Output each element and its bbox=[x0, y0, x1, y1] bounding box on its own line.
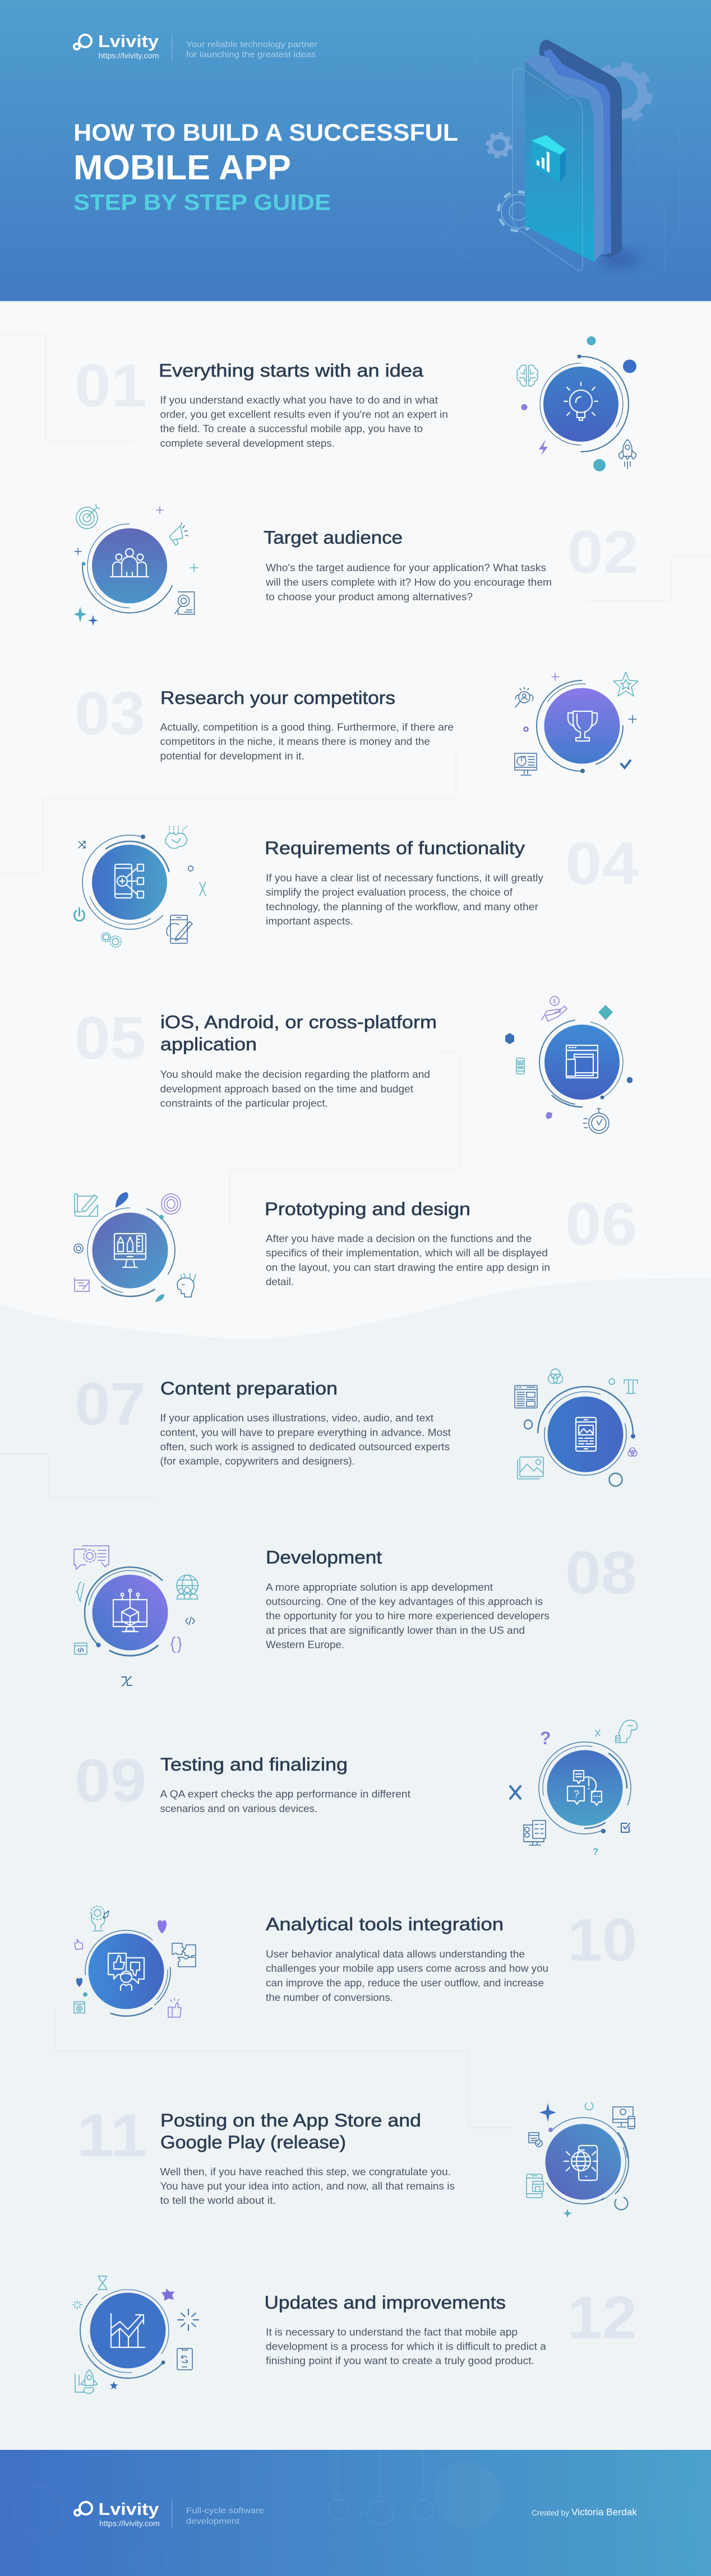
body text: the field. To create a successful mobile app, you have to bbox=[160, 423, 423, 434]
heading: Analytical tools integration bbox=[266, 1914, 504, 1934]
icon: question mark: ? bbox=[540, 1728, 551, 1748]
body text: will the users complete with it? How do you encourage them bbox=[265, 577, 552, 588]
body text: User behavior analytical data allows understanding the bbox=[266, 1948, 525, 1959]
dot bbox=[83, 1992, 87, 1996]
credit bbox=[532, 2508, 638, 2518]
body text: Who's the target audience for your application? What tasks bbox=[266, 562, 546, 573]
icon: head bbox=[616, 1720, 637, 1743]
icon: 3d model monitor bbox=[113, 1590, 147, 1632]
icon: store phone bbox=[527, 2174, 543, 2198]
heading: Content preparation bbox=[160, 1378, 338, 1398]
body text: (for example, copywriters and designers). bbox=[160, 1456, 355, 1467]
panel: step 08 bbox=[66, 1539, 637, 1686]
icon: hand bbox=[75, 1939, 82, 1949]
icon: code window bbox=[75, 1643, 87, 1655]
heading: Testing and finalizing bbox=[160, 1754, 348, 1775]
icon: monitor chart bbox=[515, 753, 537, 775]
body text: Well then, if you have reached this step, we congratulate you. bbox=[160, 2166, 451, 2177]
icon: plus bbox=[75, 548, 81, 555]
heading: iOS, Android, or cross-platform bbox=[160, 1012, 437, 1032]
body text: at prices that are significantly lower than in the US and bbox=[266, 1625, 525, 1636]
panel: step 12 bbox=[61, 2263, 637, 2398]
panel: step 05 bbox=[75, 997, 632, 1133]
illustration bbox=[61, 2263, 198, 2398]
icon: braces bbox=[76, 1582, 84, 1601]
icon: star bbox=[161, 2288, 174, 2301]
icon: hexagon bbox=[627, 1077, 632, 1083]
icon: sparkle bbox=[88, 615, 98, 626]
icon: diamond bbox=[598, 1005, 613, 1020]
footer logo bbox=[75, 2499, 160, 2528]
dot bbox=[623, 360, 636, 373]
icon: eye window bbox=[74, 2002, 85, 2013]
icon: growth chart bbox=[111, 2314, 145, 2347]
icon: cards bbox=[529, 2133, 542, 2147]
icon: rocket launch bbox=[75, 2370, 98, 2393]
heading bbox=[160, 2110, 421, 2152]
dot bbox=[521, 404, 527, 410]
icon: monitor video bbox=[613, 2107, 635, 2129]
number 04: 04 bbox=[565, 830, 639, 897]
body text: You have put your idea into action, and now, all that remains is bbox=[160, 2180, 455, 2192]
icon: design monitor bbox=[114, 1234, 146, 1267]
body text: If your application uses illustrations, video, audio, and text bbox=[160, 1412, 433, 1424]
icon: phone refresh bbox=[177, 2348, 192, 2370]
heading: Development bbox=[266, 1547, 382, 1567]
body text bbox=[266, 1582, 550, 1650]
icon: image bbox=[518, 1457, 543, 1479]
icon: blueprint small bbox=[75, 1278, 89, 1291]
icon: cross bbox=[510, 1786, 520, 1799]
icon: star bbox=[110, 2382, 118, 2389]
footer tagline bbox=[186, 2506, 264, 2526]
body text: scenarios and on various devices. bbox=[160, 1803, 317, 1814]
body text bbox=[266, 872, 543, 927]
title: STEP BY STEP GUIDE bbox=[73, 191, 331, 215]
body text bbox=[160, 1789, 410, 1814]
icon: power bbox=[75, 908, 85, 921]
body text: A more appropriate solution is app development bbox=[266, 1582, 493, 1593]
ring bbox=[584, 2101, 594, 2111]
phone outline bbox=[513, 68, 583, 270]
ring bbox=[609, 1379, 615, 1384]
body text: technology, the planning of the workflow, and many other bbox=[266, 901, 538, 912]
body text bbox=[265, 562, 552, 603]
icon: percent mark bbox=[122, 1676, 132, 1686]
icon: lightning bbox=[539, 439, 548, 456]
body text: often, such work is assigned to dedicated outsourced experts bbox=[160, 1442, 450, 1453]
icon: sparkle bbox=[73, 606, 87, 623]
icon: thumb up bbox=[168, 1998, 181, 2017]
icon: globe people bbox=[177, 1575, 198, 1599]
body text bbox=[266, 1233, 550, 1287]
body text: complete several development steps. bbox=[160, 438, 335, 449]
logo bbox=[74, 31, 159, 60]
body text: to tell the world about it. bbox=[160, 2195, 276, 2206]
panel: step 10 bbox=[64, 1906, 637, 2033]
icon: brain bbox=[517, 365, 538, 386]
icon: check bbox=[621, 761, 630, 768]
illustration bbox=[67, 1187, 196, 1314]
icon: node link bbox=[200, 882, 206, 896]
icon: petal bbox=[155, 1294, 164, 1302]
icon: cross bbox=[595, 1730, 600, 1736]
icon: phone grid bbox=[516, 1058, 524, 1074]
body text: the number of conversions. bbox=[266, 1992, 393, 2003]
body text: Western Europe. bbox=[266, 1639, 344, 1650]
logo mark bbox=[75, 2502, 92, 2515]
icon: chat gear bbox=[74, 1546, 109, 1569]
body text: After you have made a decision on the functions and the bbox=[266, 1233, 532, 1244]
body text bbox=[160, 1412, 451, 1467]
icon: trophy bbox=[568, 711, 597, 741]
panel: step 06 bbox=[67, 1187, 637, 1314]
phone illustration bbox=[487, 40, 649, 270]
body text: detail. bbox=[266, 1276, 294, 1287]
heading: application bbox=[160, 1034, 257, 1054]
body text: It is necessary to understand the fact that mobile app bbox=[266, 2327, 518, 2338]
logo name: Lvivity bbox=[99, 2499, 159, 2519]
icon: heart bbox=[158, 1920, 167, 1934]
icon: burst small bbox=[73, 2301, 82, 2309]
body text bbox=[160, 395, 448, 449]
icon: ring bbox=[188, 866, 193, 871]
icon: people bbox=[110, 549, 149, 577]
icon: blueprint bbox=[75, 1194, 98, 1216]
number 02: 02 bbox=[567, 518, 639, 586]
panel: step 04 bbox=[63, 816, 639, 949]
body text bbox=[266, 2327, 547, 2366]
ring bbox=[524, 1420, 532, 1429]
icon: hand coin bbox=[542, 997, 567, 1021]
icon: global phone bbox=[564, 2146, 598, 2180]
icon: plus bbox=[156, 507, 163, 513]
icon: chat bubbles bbox=[567, 1771, 602, 1805]
icon: devices bbox=[566, 1045, 598, 1078]
body text: challenges your mobile app users come across and how you bbox=[266, 1963, 548, 1974]
icon: stopwatch bbox=[583, 1109, 609, 1133]
icon: burst bbox=[178, 2309, 198, 2331]
title: MOBILE APP bbox=[73, 149, 291, 187]
panel: footer bbox=[0, 2450, 711, 2576]
heading bbox=[160, 1012, 437, 1054]
number 06: 06 bbox=[565, 1190, 637, 1258]
icon: search person bbox=[515, 687, 533, 707]
icon: shuffle bbox=[79, 841, 85, 848]
body text: specifics of their implementation, which will all be displayed bbox=[266, 1248, 548, 1259]
tagline bbox=[186, 40, 317, 59]
icon: rocket bbox=[619, 439, 636, 469]
panel: step 03 bbox=[75, 668, 640, 784]
body text: You should make the decision regarding the platform and bbox=[160, 1069, 430, 1080]
icon: flower bbox=[524, 728, 528, 731]
icon: tablet pen bbox=[167, 915, 192, 943]
icon: sparkle bbox=[563, 2209, 572, 2218]
body text bbox=[160, 2166, 455, 2206]
illustration bbox=[515, 668, 640, 784]
icon: plus bbox=[190, 564, 198, 572]
icon: flow diagram bbox=[115, 864, 144, 898]
icon: gears bbox=[101, 933, 121, 947]
heading: Prototyping and design bbox=[265, 1199, 470, 1219]
icon: head ideas bbox=[177, 1273, 196, 1297]
icon: hexagon bbox=[505, 1033, 514, 1044]
illustration bbox=[505, 997, 632, 1133]
icon: spiral rings bbox=[74, 1244, 83, 1253]
icon: document search bbox=[175, 592, 194, 614]
icon: type T bbox=[624, 1380, 638, 1393]
icon: overlapping circles bbox=[628, 1448, 637, 1456]
illustration bbox=[64, 1906, 196, 2033]
body text: competitors in the niche, it means there is money and the bbox=[160, 736, 430, 747]
icon: feedback person bbox=[108, 1953, 144, 1990]
ring bbox=[609, 1473, 622, 1486]
body text: important aspects. bbox=[266, 916, 353, 927]
panel: step 07 bbox=[75, 1369, 644, 1493]
icon: heart bbox=[76, 1978, 82, 1987]
title bbox=[73, 119, 458, 215]
dot bbox=[587, 336, 595, 345]
panel: step 11 bbox=[77, 2098, 647, 2226]
icon: sparkle bbox=[539, 2103, 556, 2122]
body text: can improve the app, reduce the user outflow, and increase bbox=[266, 1977, 544, 1989]
number 08: 08 bbox=[565, 1539, 637, 1606]
icon: spiral rings bbox=[161, 1194, 181, 1214]
tagline: Your reliable technology partner bbox=[186, 40, 317, 49]
body text: potential for development in it. bbox=[160, 750, 304, 762]
body text: A QA expert checks the app performance in different bbox=[160, 1789, 410, 1800]
ring bbox=[613, 2195, 630, 2212]
body text: development is a process for which it is difficult to predict a bbox=[266, 2341, 547, 2352]
illustration bbox=[519, 2098, 647, 2226]
icon: plus bbox=[629, 715, 636, 723]
icon: brain network bbox=[165, 826, 187, 849]
icon: puzzle bbox=[172, 1943, 196, 1967]
phone middle layer bbox=[544, 49, 611, 256]
title: HOW TO BUILD A SUCCESSFUL bbox=[73, 119, 458, 146]
floating cube bbox=[532, 135, 566, 182]
dot bbox=[548, 2128, 553, 2132]
body text: the opportunity for you to hire more experienced developers bbox=[266, 1610, 550, 1621]
logo url: https://lvivity.com bbox=[99, 51, 159, 60]
body text bbox=[160, 1069, 430, 1109]
heading: Updates and improvements bbox=[265, 2292, 506, 2313]
icon: light bulb bbox=[564, 382, 598, 420]
number 01: 01 bbox=[75, 351, 147, 419]
number 12: 12 bbox=[567, 2283, 637, 2351]
heading: Google Play (release) bbox=[160, 2132, 346, 2152]
phone back bbox=[539, 40, 622, 258]
heading: Everything starts with an idea bbox=[159, 360, 423, 381]
outline gear bbox=[498, 192, 538, 231]
icon: target bbox=[76, 504, 100, 529]
body text: If you understand exactly what you have to do and in what bbox=[160, 395, 438, 406]
icon: megaphone bbox=[169, 523, 188, 545]
icon: star bbox=[613, 672, 638, 696]
phone light layer bbox=[525, 54, 604, 262]
heading: Requirements of functionality bbox=[265, 838, 525, 858]
number 05: 05 bbox=[75, 1004, 146, 1072]
dot bbox=[159, 1215, 164, 1220]
icon: plus bbox=[552, 673, 559, 680]
logo mark bbox=[74, 35, 91, 49]
body text: on the layout, you can start drawing the entire app design in bbox=[266, 1262, 550, 1273]
body text: content, you will have to prepare everything in advance. Most bbox=[160, 1427, 451, 1438]
icon: phone with image bbox=[576, 1417, 596, 1451]
small gear bbox=[487, 133, 511, 157]
illustration bbox=[66, 1546, 198, 1686]
number 03: 03 bbox=[75, 679, 145, 747]
tagline: for launching the greatest ideas bbox=[186, 50, 316, 59]
phone front bbox=[525, 62, 594, 262]
icon: hourglass bbox=[98, 2276, 107, 2290]
body text: development approach based on the time and budget bbox=[160, 1083, 413, 1095]
light bulbs decoration bbox=[328, 2450, 433, 2538]
illustration bbox=[510, 1720, 645, 1857]
body text: Actually, competition is a good thing. Furthermore, if there are bbox=[160, 722, 454, 733]
icon: petal bbox=[116, 1192, 128, 1208]
illustration bbox=[67, 503, 198, 628]
icon: chat bubbles: ? bbox=[574, 1789, 579, 1800]
icon: web layout bbox=[515, 1386, 537, 1408]
body text: If you have a clear list of necessary functions, it will greatly bbox=[266, 872, 543, 883]
credit: Created by bbox=[532, 2508, 569, 2517]
logo url: https://lvivity.com bbox=[99, 2519, 160, 2528]
icon: braces bbox=[171, 1637, 181, 1652]
heading: Target audience bbox=[264, 527, 403, 548]
icon: head gear bbox=[91, 1906, 109, 1931]
icon: code tag bbox=[186, 1617, 195, 1625]
number 11: 11 bbox=[77, 2101, 147, 2169]
body text bbox=[266, 1948, 548, 2003]
icon: overlapping circles bbox=[548, 1369, 563, 1383]
wave background lower section bbox=[0, 1278, 711, 2450]
large gear bbox=[593, 65, 649, 121]
dot bbox=[593, 459, 606, 471]
footer tagline: development bbox=[186, 2517, 240, 2526]
icon: question mark: ? bbox=[593, 1846, 598, 1857]
panel: step 09 bbox=[75, 1720, 645, 1857]
body text: order, you get excellent results even if you're not an expert in bbox=[160, 409, 448, 420]
heading: Posting on the App Store and bbox=[160, 2110, 421, 2130]
panel: header bbox=[0, 0, 711, 302]
panel: step 02 bbox=[67, 503, 639, 628]
body text: finishing point if you want to create a truly good product. bbox=[266, 2355, 534, 2366]
number 07: 07 bbox=[75, 1370, 146, 1438]
body text: constraints of the particular project. bbox=[160, 1097, 328, 1109]
icon: monitor document bbox=[524, 1820, 546, 1845]
panel: step 01 bbox=[75, 336, 638, 471]
icon: hexagon bbox=[546, 1112, 552, 1119]
credit: Victoria Berdak bbox=[571, 2508, 638, 2518]
body text bbox=[160, 722, 454, 762]
heading: Research your competitors bbox=[160, 688, 395, 708]
logo name: Lvivity bbox=[98, 31, 159, 51]
body text: outsourcing. One of the key advantages of this approach is bbox=[266, 1596, 543, 1607]
footer tagline: Full-cycle software bbox=[186, 2506, 264, 2515]
illustration bbox=[63, 816, 206, 949]
icon: hand coin: $ bbox=[553, 999, 556, 1005]
illustration bbox=[515, 1369, 644, 1493]
number 09: 09 bbox=[75, 1746, 146, 1814]
body text: simplify the project evaluation process, the choice of bbox=[266, 887, 513, 898]
icon: check box bbox=[621, 1823, 630, 1832]
body text: to choose your product among alternatives? bbox=[266, 591, 473, 603]
illustration bbox=[517, 336, 638, 471]
number 10: 10 bbox=[567, 1906, 637, 1973]
